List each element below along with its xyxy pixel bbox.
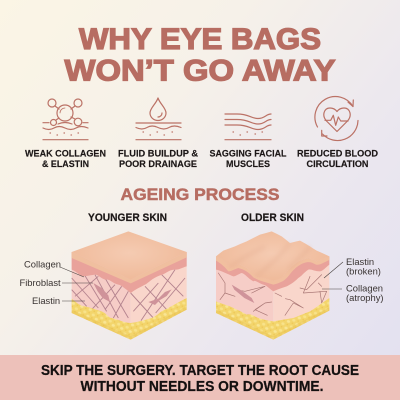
captions: WEAK COLLAGEN (25, 148, 106, 160)
labels: older skin (322, 256, 384, 303)
diagram: older skin cube (216, 231, 329, 340)
labels: older skin: (atrophy) (346, 292, 384, 303)
icon: heart with circular arrows (315, 97, 358, 141)
title: WHY EYE BAGS (79, 23, 321, 56)
footer band (0, 355, 400, 400)
labels: younger skin: Elastin (32, 295, 60, 306)
captions: REDUCED BLOOD (297, 148, 378, 160)
heading: older skin: OLDER SKIN (241, 212, 304, 224)
labels: older skin: (broken) (346, 266, 381, 276)
heading: younger skin: YOUNGER SKIN (88, 212, 167, 224)
title: WON’T GO AWAY (64, 54, 336, 88)
icon: sagging muscle layers (225, 114, 271, 140)
captions: SAGGING FACIAL (210, 148, 287, 160)
captions: POOR DRAINAGE (119, 159, 197, 170)
icon: molecule over skin (43, 99, 88, 140)
captions: FLUID BUILDUP & (118, 148, 198, 160)
captions: & ELASTIN (42, 159, 89, 170)
labels: older skin: Elastin (346, 256, 374, 267)
labels: younger skin: Fibroblast (20, 277, 61, 288)
labels: younger skin: Collagen (24, 258, 61, 270)
footer band: SKIP THE SURGERY. TARGET THE ROOT CAUSE (41, 363, 359, 379)
captions: MUSCLES (226, 159, 270, 170)
diagram: younger skin cube (72, 231, 187, 340)
captions (25, 148, 378, 170)
footer band: WITHOUT NEEDLES OR DOWNTIME. (80, 379, 324, 395)
heading: ageing process: AGEING PROCESS (120, 185, 280, 204)
title (64, 23, 336, 88)
labels: older skin: Collagen (346, 282, 383, 294)
labels: younger skin (20, 258, 93, 306)
captions: CIRCULATION (306, 159, 369, 170)
icon: water drop over skin (136, 98, 181, 140)
